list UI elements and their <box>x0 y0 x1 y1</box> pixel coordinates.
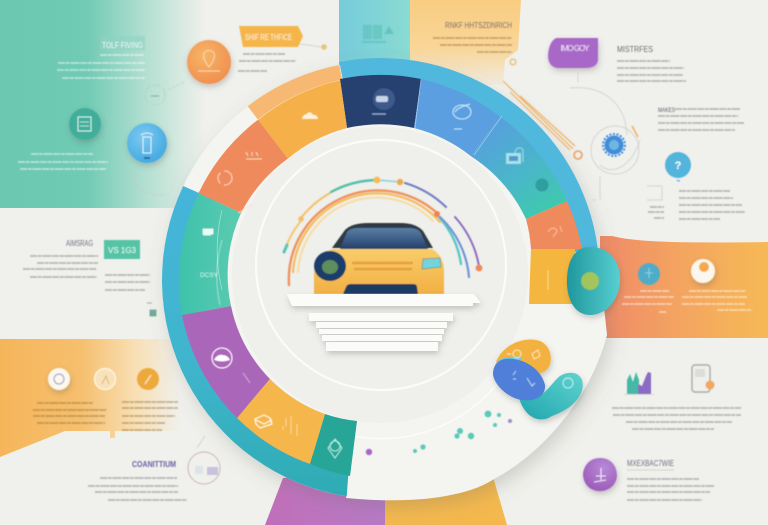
text: teal panel body <box>18 154 108 169</box>
icon: orange cloud <box>302 112 318 119</box>
text: orange panel body <box>33 403 107 423</box>
icon: bar chart <box>624 372 654 394</box>
icon: top strip house <box>384 26 394 34</box>
icon: coral mark <box>218 152 262 213</box>
text: top-left heading: TOLF FIVING <box>102 40 143 50</box>
segment: blue to teal <box>471 117 567 219</box>
arc: pale yellow <box>298 198 433 272</box>
text: left heading with tag: VS 1G3 <box>108 246 137 255</box>
blob glyphs <box>507 350 573 388</box>
left lamp green centre <box>322 260 338 274</box>
text: bottom-right heading: MXEXBAC7WIE <box>627 459 674 468</box>
decorative ring <box>256 140 506 390</box>
main white disc <box>162 61 607 500</box>
text: top-right heading <box>617 44 686 81</box>
icon: teal document circle <box>69 108 101 140</box>
small box with label <box>647 186 664 218</box>
icon: blue circle <box>127 123 167 163</box>
orange dashes <box>503 81 582 159</box>
panel: right orange block <box>600 236 768 338</box>
icon: yellow marks <box>283 416 297 436</box>
segment: purple <box>182 306 270 418</box>
icon: thin circle card <box>188 436 220 484</box>
text: lower-right body <box>612 408 741 429</box>
panel: top-left teal block <box>0 0 205 208</box>
text: top-right heading: MISTRFES <box>617 44 653 54</box>
dial icon <box>145 82 184 105</box>
car body <box>314 223 444 294</box>
text: bottom-left heading: COANITTIUM <box>132 459 176 469</box>
roof <box>332 223 433 248</box>
platform arcs <box>284 180 479 285</box>
grille bars <box>352 263 413 269</box>
label tag: orange <box>239 26 303 47</box>
arc: teal <box>438 216 461 264</box>
icon: white circle <box>48 368 70 390</box>
light teal blob <box>494 357 522 380</box>
label tag: purple: IMO GOY <box>560 44 590 53</box>
icon: navy badge <box>372 88 395 114</box>
icon: coral glyph <box>548 226 562 237</box>
icon: purple circle car <box>212 348 232 368</box>
ring around gear <box>591 126 639 174</box>
text: orange tag caption <box>238 54 296 71</box>
outer band: left <box>162 186 349 496</box>
text: right paragraph <box>658 108 744 130</box>
text: left body two <box>105 275 150 290</box>
small icon <box>147 303 156 316</box>
step 1 <box>309 313 453 321</box>
icon: blue glyph <box>453 104 471 129</box>
platform <box>287 294 481 351</box>
arc dots <box>298 177 482 271</box>
icon: phone card <box>692 365 714 392</box>
icon: blue circle on orange <box>638 263 660 285</box>
lower-right blob cluster <box>493 340 583 419</box>
egg inner mark <box>581 272 599 290</box>
lower grille <box>343 284 418 294</box>
orange blob <box>496 340 551 374</box>
text: orange right body two <box>682 291 752 310</box>
text: right paragraph: MAKES <box>658 108 675 114</box>
text: teal segment label: DCSY <box>200 273 218 279</box>
step 3 <box>319 329 444 334</box>
connector with dot <box>300 44 327 50</box>
panel: top blue strip <box>339 0 410 70</box>
outer band: light orange <box>248 65 342 120</box>
segment: dark teal <box>310 414 357 476</box>
arc: yellow <box>293 193 440 272</box>
step 4 <box>322 335 442 341</box>
text: help body <box>679 191 745 219</box>
step 2 <box>316 322 447 328</box>
orange bolt <box>632 126 638 137</box>
line: purple stroke <box>243 373 250 383</box>
inner disc circle <box>232 127 528 423</box>
text: left heading with tag: AIMSRAG <box>66 239 93 248</box>
text: bottom-left heading <box>88 459 187 500</box>
platform top slab <box>287 294 481 306</box>
blue blob <box>493 359 545 400</box>
panel: bottom purple block <box>265 470 385 525</box>
right yellow tab <box>529 249 575 304</box>
icon: teal tile <box>203 229 213 235</box>
icon: yellow envelope <box>255 415 272 428</box>
teal swoosh <box>519 373 583 419</box>
step 5 <box>326 342 438 351</box>
segment: yellow <box>237 379 325 464</box>
left lamp <box>314 251 346 281</box>
outer band: top right <box>339 58 598 252</box>
arc: periwinkle <box>440 217 469 277</box>
icon: help bubble: ? <box>675 160 682 172</box>
panel: top yellow block <box>410 0 521 85</box>
text: top yellow heading: RNKF HHTSZDNRICH <box>445 21 512 30</box>
arc: outer multi-colour <box>284 222 300 252</box>
segment: blue 1 <box>414 79 500 156</box>
ring: wheel of segments <box>162 58 598 496</box>
text: left body <box>23 256 98 277</box>
text: top-left heading <box>57 36 145 78</box>
right headlamp <box>422 258 441 269</box>
icon: top blue strip doc <box>362 25 386 43</box>
icons on segments <box>200 88 562 458</box>
icon: blue tile <box>506 148 523 164</box>
label tag: orange: SHIF RE THFICE <box>245 33 292 42</box>
icon: teal knot <box>536 178 548 192</box>
car illustration <box>284 177 482 294</box>
teal egg blob <box>567 247 620 315</box>
arc: coral main <box>289 190 437 285</box>
thin bracket <box>135 172 165 195</box>
segment: orange <box>258 79 347 159</box>
text: left heading with tag <box>66 239 140 259</box>
panel: lower-left orange block <box>0 339 180 457</box>
body <box>314 249 444 294</box>
disc teal specks <box>366 411 512 455</box>
windshield <box>340 228 428 249</box>
tab mark <box>547 270 549 290</box>
icon: purple blob <box>583 458 617 491</box>
icon: pale ring circle <box>94 368 116 390</box>
text: top yellow heading <box>433 21 512 52</box>
white separators <box>217 79 502 290</box>
text: orange panel body two <box>122 402 178 430</box>
icon: orange circle <box>187 40 231 84</box>
segment: coral right <box>526 201 582 249</box>
text: bottom-right heading <box>627 459 714 500</box>
segment: coral <box>198 120 288 213</box>
line: teal segment arc <box>217 240 222 305</box>
segment: navy <box>340 75 421 128</box>
label tag: purple <box>548 38 598 68</box>
text: orange right body <box>622 291 674 312</box>
icon: gear <box>603 134 625 156</box>
icon: dark teal pin <box>328 439 342 458</box>
icon: white donut <box>691 259 715 283</box>
thin connector lines <box>570 70 640 200</box>
panel: bottom yellow block <box>385 470 507 525</box>
icon: orange circle small <box>137 368 159 390</box>
segment: teal <box>179 193 241 315</box>
ring marker top <box>510 59 516 65</box>
icon: help bubble <box>665 152 691 182</box>
